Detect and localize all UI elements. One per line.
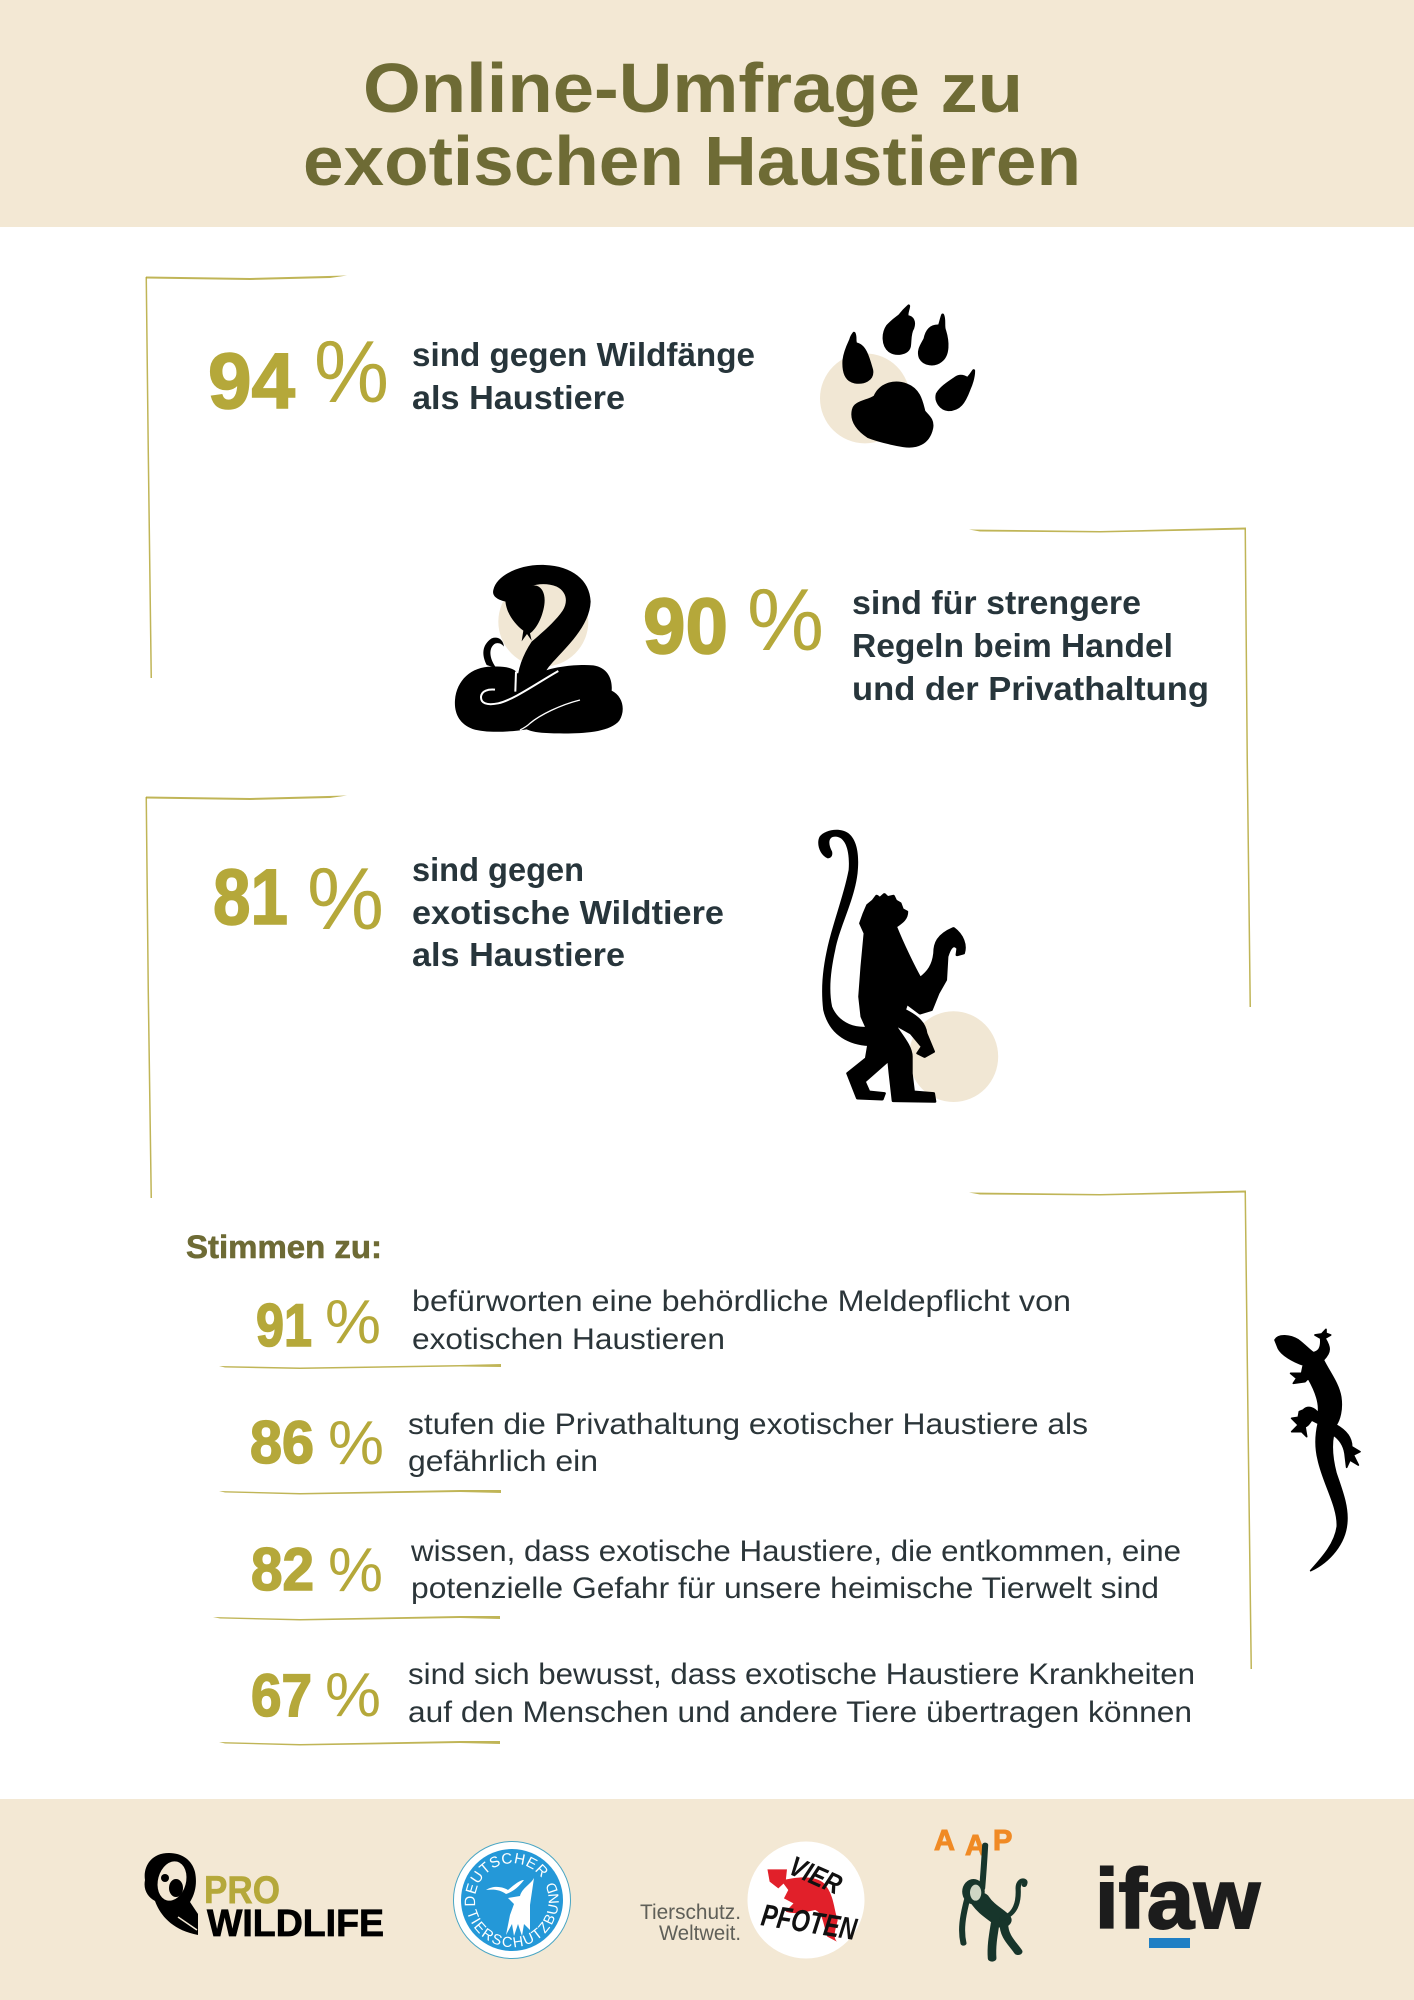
statement xyxy=(852,585,1209,708)
icon: monkey xyxy=(818,830,998,1102)
logo: Vier Pfoten: VIER xyxy=(785,1850,847,1901)
stat: 81 percent xyxy=(213,849,724,974)
logo: Deutscher Tierschutzbund: DEUTSCHER xyxy=(464,1853,548,1906)
stat: 90 percent xyxy=(643,570,1209,708)
statement: sind gegen xyxy=(412,852,584,889)
tagline: Tierschutz. Weltweit.: Weltweit. xyxy=(659,1922,741,1945)
row: 86 percent: % xyxy=(328,1409,384,1478)
statement xyxy=(412,852,724,974)
number: 81 xyxy=(213,852,288,941)
heading: Stimmen zu: Stimmen zu: xyxy=(186,1229,382,1265)
row: 86 percent: stufen die Privathaltung exotischer Haustiere als xyxy=(408,1408,1088,1441)
icon: paw print xyxy=(820,306,974,446)
logo: ifaw: ifaw xyxy=(1095,1852,1261,1946)
row: 91 percent xyxy=(256,1285,1071,1359)
statement xyxy=(412,337,755,417)
row: 91 percent: % xyxy=(325,1288,381,1357)
stat: 94 percent xyxy=(208,322,755,425)
statement: sind gegen Wildfänge xyxy=(412,337,755,374)
title: Online-Umfrage zu xyxy=(363,49,1023,127)
row: 82 percent: wissen, dass exotische Haustiere, die entkommen, eine xyxy=(410,1535,1181,1568)
row: 67 percent: sind sich bewusst, dass exotische Haustiere Krankheiten xyxy=(408,1658,1195,1691)
number: 90 xyxy=(643,581,728,670)
statement: sind für strengere xyxy=(852,585,1141,622)
row: 86 percent: 86 xyxy=(250,1409,314,1476)
row: 91 percent: 91 xyxy=(256,1292,312,1359)
statement: Regeln beim Handel xyxy=(852,628,1173,665)
logo: AAP xyxy=(934,1825,1025,1958)
row: 91 percent: exotischen Haustieren xyxy=(412,1323,725,1356)
number: 94 xyxy=(208,336,295,425)
row: 86 percent: gefährlich ein xyxy=(408,1445,598,1478)
logo: Pro Wildlife: PRO xyxy=(204,1869,280,1912)
row: 82 percent: potenzielle Gefahr für unsere heimische Tierwelt sind xyxy=(411,1572,1159,1605)
logo: Deutscher Tierschutzbund xyxy=(453,1841,571,1959)
row: 67 percent: 67 xyxy=(251,1662,312,1729)
footer band xyxy=(0,1799,1414,2000)
statement: und der Privathaltung xyxy=(852,671,1209,708)
logo: Pro Wildlife xyxy=(145,1853,384,1945)
logo: Pro Wildlife: WILDLIFE xyxy=(207,1903,384,1945)
logo: AAP: A xyxy=(965,1830,986,1862)
statement: als Haustiere xyxy=(412,937,625,974)
title xyxy=(303,49,1081,200)
logo: Deutscher Tierschutzbund: TIERSCHUTZBUND xyxy=(468,1883,559,1948)
logo: Vier Pfoten: PFOTEN xyxy=(759,1897,860,1947)
row: 67 percent: auf den Menschen und andere Tiere übertragen können xyxy=(408,1696,1192,1729)
row: 91 percent: befürworten eine behördliche Meldepflicht von xyxy=(412,1285,1071,1318)
logo: AAP: P xyxy=(993,1825,1012,1857)
percent sign: % xyxy=(314,322,389,421)
row: 86 percent xyxy=(250,1408,1088,1478)
statement: als Haustiere xyxy=(412,380,625,417)
row: 82 percent: 82 xyxy=(251,1536,314,1603)
statement: exotische Wildtiere xyxy=(412,895,724,932)
percent sign: % xyxy=(747,570,824,669)
tagline: Tierschutz. Weltweit.: Tierschutz. xyxy=(640,1901,741,1924)
percent sign: % xyxy=(307,849,384,948)
row: 82 percent: % xyxy=(328,1536,383,1605)
row: 67 percent xyxy=(251,1658,1195,1730)
row: 67 percent: % xyxy=(325,1661,381,1730)
logo: Vier Pfoten xyxy=(748,1842,864,1958)
logo: AAP: A xyxy=(934,1825,955,1857)
tagline: Tierschutz. Weltweit. xyxy=(640,1901,741,1945)
icon: gecko xyxy=(1275,1329,1360,1571)
header band xyxy=(0,0,1414,227)
row: 82 percent xyxy=(251,1535,1181,1605)
title: exotischen Haustieren xyxy=(303,122,1081,200)
icon: cobra xyxy=(455,565,623,733)
